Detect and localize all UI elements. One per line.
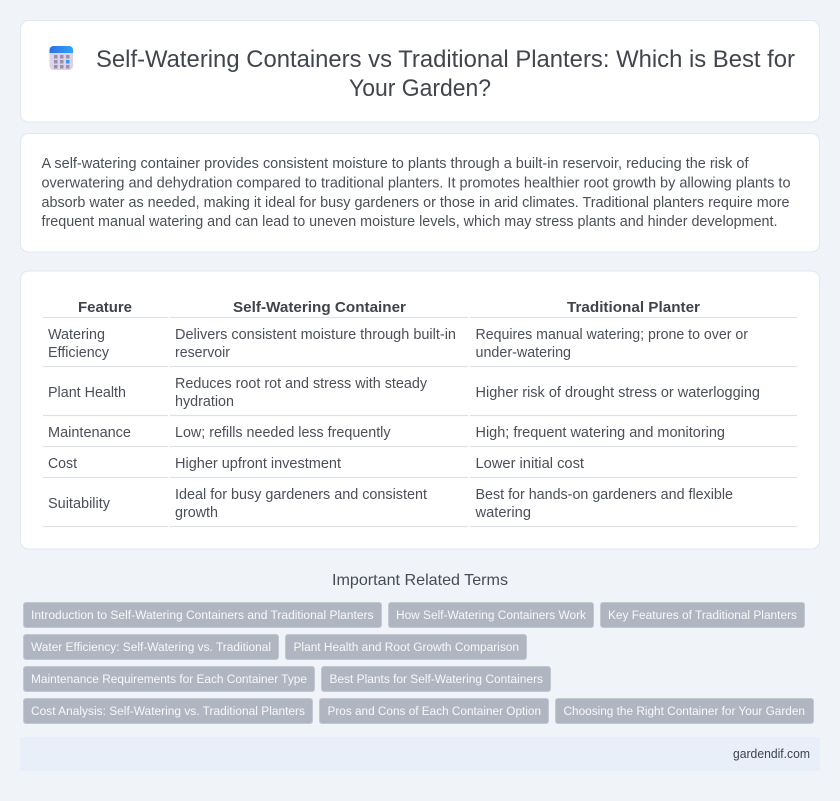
panel: header — [20, 20, 820, 122]
tag row 1: Key Features of Traditional Planters — [608, 608, 797, 622]
row: suitability: Ideal for busy gardeners and consistent — [175, 487, 427, 503]
row: suitability: Suitability — [48, 496, 111, 512]
row: cost: Higher upfront investment — [175, 456, 341, 472]
row: cost: Cost — [48, 456, 77, 472]
tag row 4: Cost Analysis: Self-Watering vs. Traditional Planters — [31, 704, 305, 718]
footer — [20, 737, 820, 771]
text block: introduction paragraph: A self-watering container provides consistent moisture to plants through a built-in reservoir, reducing the risk of — [42, 156, 750, 172]
row: cost — [48, 456, 584, 472]
row: plant health: Reduces root rot and stress with steady — [175, 376, 428, 392]
row: plant health — [48, 376, 760, 410]
row: suitability: Best for hands-on gardeners and flexible — [476, 487, 733, 503]
tag row 4: Pros and Cons of Each Container Option — [328, 704, 541, 718]
tag row 3: Best Plants for Self-Watering Containers — [330, 672, 543, 686]
row: plant health: Higher risk of drought stress or waterlogging — [476, 385, 760, 401]
row: maintenance — [48, 425, 725, 441]
text block: introduction paragraph — [42, 156, 791, 230]
row: maintenance: Low; refills needed less frequently — [175, 425, 391, 441]
tag row 1: Introduction to Self-Watering Containers and Traditional Planters — [31, 608, 374, 622]
tag row 1 — [24, 602, 804, 628]
text block: introduction paragraph: absorb water as needed, making it ideal for busy gardeners or those in arid climates. Traditional planters require more — [42, 195, 790, 211]
title: Self-Watering Containers vs Traditional Planters: Which is Best for — [96, 46, 795, 73]
footer: gardendif.com — [733, 747, 810, 761]
panel: introduction — [20, 134, 820, 252]
row: maintenance: Maintenance — [48, 425, 131, 441]
text block: introduction paragraph: frequent manual watering and can lead to uneven moisture levels, which may stress plants and hinder development. — [42, 214, 778, 230]
row: plant health: hydration — [175, 394, 234, 410]
tag row 4 — [24, 698, 814, 724]
table header: Self-Watering Container — [233, 299, 406, 316]
related term tags — [24, 602, 814, 724]
table header: Traditional Planter — [567, 299, 700, 316]
row: watering efficiency: Requires manual watering; prone to over or — [476, 327, 748, 343]
heading: important related terms: Important Related Terms — [332, 572, 508, 589]
title — [96, 46, 795, 102]
table header — [78, 299, 700, 316]
text block: introduction paragraph: overwatering and dehydration compared to traditional planters. It promotes healthier root growth by allowing plants to — [42, 176, 791, 192]
table header: Feature — [78, 299, 132, 316]
row: maintenance: High; frequent watering and monitoring — [476, 425, 725, 441]
title: Your Garden? — [349, 75, 491, 102]
row: watering efficiency — [48, 327, 748, 361]
tag row 2: Water Efficiency: Self-Watering vs. Traditional — [31, 640, 271, 654]
row: watering efficiency: under-watering — [476, 345, 571, 361]
row: suitability: growth — [175, 505, 218, 521]
tag row 2: Plant Health and Root Growth Comparison — [294, 640, 519, 654]
row: watering efficiency: reservoir — [175, 345, 230, 361]
row: watering efficiency: Delivers consistent moisture through built-in — [175, 327, 456, 343]
icon: calendar — [50, 46, 73, 70]
row: plant health: Plant Health — [48, 385, 126, 401]
tag row 1: How Self-Watering Containers Work — [396, 608, 587, 622]
tag row 4: Choosing the Right Container for Your Garden — [564, 704, 805, 718]
tag row 3 — [24, 666, 550, 692]
row: suitability — [48, 487, 733, 521]
tag row 3: Maintenance Requirements for Each Container Type — [31, 672, 307, 686]
panel: comparison table — [20, 271, 820, 549]
row: watering efficiency: Efficiency — [48, 345, 110, 361]
row: cost: Lower initial cost — [476, 456, 584, 472]
row: suitability: watering — [474, 505, 531, 521]
tag row 2 — [24, 634, 526, 660]
row: watering efficiency: Watering — [48, 327, 105, 343]
